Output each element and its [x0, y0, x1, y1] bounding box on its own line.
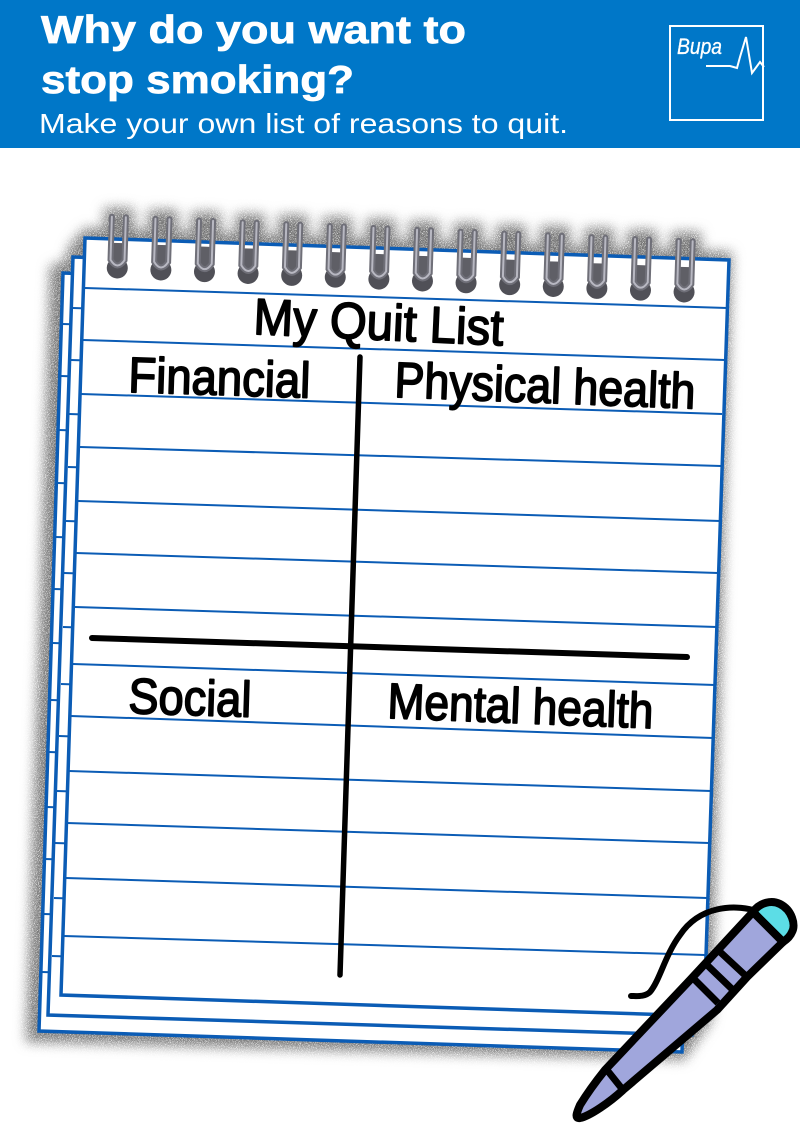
main sheet: [61, 238, 729, 1016]
pen body: [577, 912, 783, 1118]
subtitle: Make your own list of reasons to quit.: [39, 108, 568, 139]
heading: Mental health: Mental health: [387, 673, 655, 739]
logo: Bupa: [670, 26, 764, 120]
pen clip wire: [631, 908, 753, 996]
notebook: [39, 217, 729, 1052]
pen: [577, 902, 794, 1118]
back sheet 2: [48, 257, 717, 1035]
pen cap: [753, 902, 794, 942]
heading: Physical health: Physical health: [394, 352, 697, 420]
back sheet 3: [39, 273, 707, 1052]
list title: My Quit List: [253, 288, 505, 356]
title: [41, 9, 466, 102]
title: Why do you want to: [41, 9, 466, 52]
pen bands: [607, 950, 747, 1090]
header banner: [0, 0, 800, 148]
notebook shadow: [26, 208, 732, 1060]
heading: Financial: Financial: [128, 347, 311, 409]
heading: Social: Social: [128, 668, 252, 728]
vertical divider: [340, 357, 360, 975]
logo: Bupa: Bupa: [677, 34, 722, 59]
title: stop smoking?: [41, 59, 354, 102]
horizontal divider: [92, 638, 687, 657]
spiral binding rings: [106, 217, 696, 303]
